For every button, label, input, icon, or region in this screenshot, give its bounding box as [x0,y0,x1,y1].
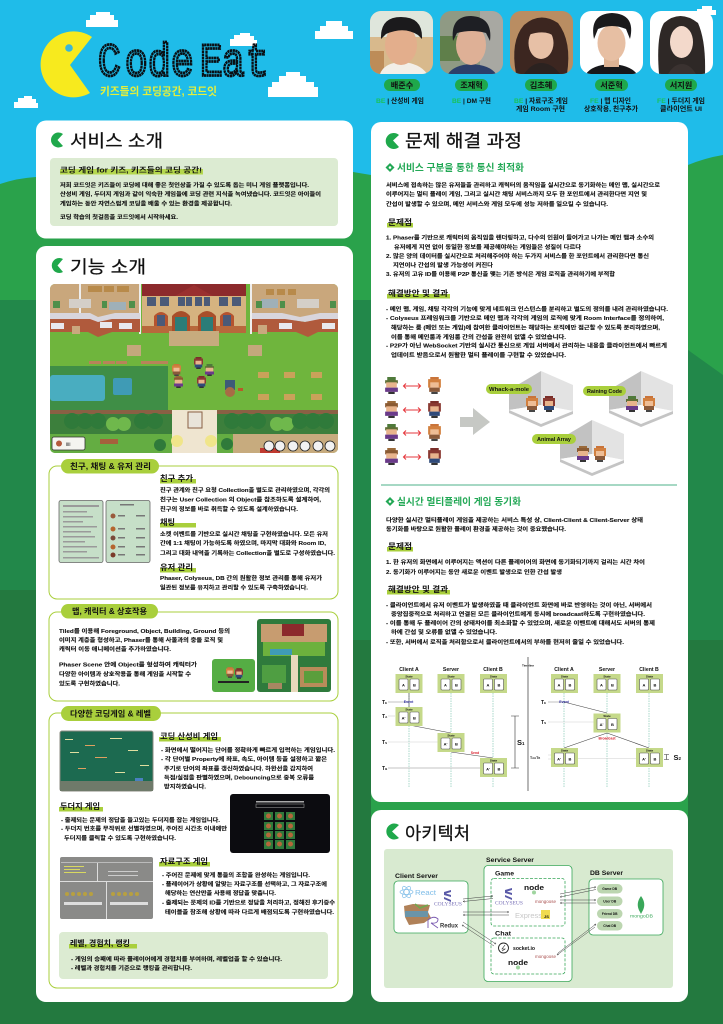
title: Code Eat [98,37,269,90]
member: 서지원: FE | 두더지 게임 [657,96,705,105]
text block: data structure game: - 출제되는 문제의 ID를 기반으로 정답을 처리하고, 정해진 후기증수 [162,898,336,906]
text block: acid rain game: 코딩 산성비 게임 [160,731,218,741]
db server: mongoDB [630,914,653,920]
text block: chat: 그리고 대화 내역을 기록하는 Collection을 별도로 구성하였습니다. [160,549,335,557]
labels: event, send, broadcast: Send [471,751,479,755]
figure: room raining code: Raining Code [587,389,622,395]
game server: node [524,883,544,892]
message lines [409,693,649,758]
column headers: Client A [399,667,419,673]
member: 배준수: 배준수 [391,80,414,90]
text block: map description [59,627,230,688]
time labels: TS [382,740,387,746]
time labels: TE [382,700,387,706]
state boxes: A' [444,742,447,746]
figure: room animal array: Animal Array [537,437,571,443]
text block: data structure game: 테이블을 참조해 상황에 따라 다르게 배점되도록 구현하였습니다. [165,908,334,916]
text box: service description: 코딩 학습의 첫걸음을 코드잇에서 시작하세요. [60,213,178,221]
member: 조재혁 [452,79,491,105]
column headers [399,667,659,673]
text block: data structure game: 해당하는 연산만을 사용해 정답을 맞춥니다. [165,889,276,897]
section 1 problems list: 1. Phaser를 기반으로 캐릭터의 움직임을 렌더링하고, 다수의 인원이 들어가고 나가는 메인 맵과 소수의 [386,234,654,242]
text box: service description: 저희 코드잇은 키즈들이 코딩에 대해 좋은 첫인상을 가질 수 있도록 돕는 미니 게임 플랫폼입니다. [60,181,309,189]
state boxes: State [490,758,497,762]
text block: map description: 이미지 계층을 형성하고, Phaser를 통해 사물과의 충돌 로직 및 [59,636,224,644]
section 2 solutions list: - 이를 통해 두 플레이어 간의 상태차이를 최소화할 수 있었으며, 새로운 이벤트에 대해서도 서버의 통제 [386,619,655,627]
client server: COLYSEUS [434,902,462,908]
text block: acid rain game: 득점/실점을 판별하였으며, Debouncing으로 중복 오류를 [164,774,315,782]
member: 서준혁 [584,79,639,113]
section 2 problems heading: 문제점 [388,541,412,551]
brackets S1 and S2 [511,716,682,768]
section 1 solutions list [386,305,668,359]
timeline [522,657,534,791]
state boxes: State [447,674,455,678]
text block: chat: 간에 1:1 채팅이 가능하도록 하였으며, 마지막 대화와 Room ID, [160,539,326,547]
sub panel: coding games and levels [49,706,338,988]
text block: user management: 유저 관리 [160,562,193,572]
state boxes: A' [486,766,490,772]
state boxes: State [603,714,611,718]
arrow: big gray [460,408,490,435]
figure: room animal array [532,420,624,476]
text block: add friends: 친구의 정보를 바로 취득할 수 있도록 설계하였습니다. [160,505,298,513]
section 1 solutions list: 해당하는 룸 (메인 또는 게임)에 참여한 클라이언트는 해당하는 로직에만 접근할 수 있도록 분리하였으며, [391,324,660,332]
sequence diagram [382,657,682,791]
member: 서준혁: FE | 맵 디자인 [590,96,631,105]
state boxes: B [455,742,458,746]
section 1 intro text [386,181,661,208]
state boxes: State [646,674,653,678]
section 1 solutions list: - Colyseus 프레임워크를 기반으로 메인 맵과 각각의 게임의 로직에 맞게 Room Interface를 정의하여, [386,314,664,322]
text block: acid rain game: 방지하였습니다. [164,782,206,790]
game map screenshot [50,284,338,453]
section 2 solutions list [386,601,655,646]
timing guide lines [388,702,636,768]
team members [370,11,713,74]
column headers: Server [599,667,615,673]
member: 배준수: BE | 산성비 게임 [376,96,424,105]
text block: whack a mole game: 두더지를 클릭할 수 있도록 구현하였습니다. [64,834,176,842]
game server: mongoose [535,899,557,904]
state boxes: B [569,682,572,688]
text block: acid rain game: 주기로 단어의 좌표를 갱신하였습니다. 하한선을 감지하여 [164,764,313,772]
text block: chat: 채팅 [160,517,175,527]
timeline: Timeline [522,664,534,668]
clouds [14,6,716,108]
member: 조재혁: BE | DM 구현 [452,96,491,105]
labels: event, send, broadcast: Broadcast [598,736,616,740]
state boxes: B [413,682,416,688]
chat server [491,930,565,974]
section 2 intro text: 다양한 실시간 멀티플레이 게임을 제공하는 서비스 특성 상, Client-Client & Client-Server 상태 [386,516,643,524]
pill heading [61,459,159,474]
state boxes: B [611,682,614,688]
time labels: TE [541,700,546,706]
text block: add friends: 친구 관계와 친구 요청 Collection을 별도로 관리하였으며, 각각의 [160,486,330,494]
section 1 problems list: 3. 유저의 고유 ID를 이용해 P2P 통신을 맺는 기존 방식은 게임 로직을 관리하기에 부적합 [386,270,616,278]
callout: level, experience, ranking: - 레벨과 경험치를 기준으로 랭킹을 관리합니다. [71,964,192,972]
text block: whack a mole game: 두더지 게임 [60,801,100,811]
section 1 solutions list: - 메인 맵, 게임, 채팅 각각의 기능에 맞게 네트워크 인스턴스를 분리하고 별도의 정의를 내려 관리하였습니다. [386,305,668,313]
chat server: mongoose [535,954,557,959]
db server: Chat DB [603,924,617,928]
labels: event, send, broadcast: Event [559,700,570,704]
pill heading: 친구, 채팅 & 유저 관리 [70,461,151,471]
time labels: TA [382,714,388,720]
column headers: Server [443,667,459,673]
logo: pac-man [41,31,92,97]
state boxes: State [490,674,497,678]
state boxes: A' [642,756,646,762]
section 1 intro text: 간섭이 발생할 수 있으며, 메인 서비스와 게임 모두에 성능 저하를 일으킬 수 있습니다. [386,200,608,208]
text block: map description: Phaser Scene 안에 Object를 형성하여 캐릭터가 [59,660,198,668]
callout: level, experience, ranking: - 게임의 승패에 따라 플레이어에게 경험치를 부여하며, 레벨업을 할 수 있습니다. [71,955,282,963]
text block: data structure game [159,856,336,916]
section 1 problems list: 유저에게 지연 없이 동일한 정보를 제공해야하는 게임들은 성질이 다르다 [394,243,582,251]
section 1 solutions list: 이를 통해 메인룸과 게임룸 간의 간섭을 완전히 없앨 수 있었습니다. [391,333,566,341]
panel: architecture [371,810,688,1002]
db server [589,870,663,935]
section 1 solutions list: - P2P가 아닌 WebSocket 기반의 실시간 통신으로 게임 서버에서 관리하는 내용을 클라이언트에서 빠르게 [386,342,667,350]
text block: map description: 캐릭터 이동 애니메이션을 추가하였습니다. [59,645,171,653]
text block: user management: Phaser, Colyseus, DB 간의 원활한 정보 관리를 통해 유저가 [160,574,323,582]
image: acid rain game [60,731,153,791]
section 2 solutions list: - 클라이언트에서 유저 이벤트가 발생하였을 때 클라이언트 화면에 바로 반영하는 것이 아닌, 서버에서 [386,601,652,609]
heading: features: 기능 소개 [70,257,146,277]
column headers: Client A [554,667,574,673]
photo: 배준수 [370,11,433,74]
state boxes: A' [402,716,405,720]
text block: whack a mole game: - 두더지 번호를 무작위로 선별하였으며, 주어진 시간초 이내에만 [61,824,228,832]
state boxes: A [643,682,646,688]
state boxes: State [405,674,413,678]
text block: acid rain game [159,731,335,790]
sub panel: map, character, interaction [49,604,338,701]
game server: Game [495,870,514,878]
subtitle: 키즈들의 코딩공간, 코드잇 [100,84,217,98]
column headers: Client B [483,667,503,673]
section 2 solutions list: 중앙집중적으로 처리하고 연결된 모든 클라이언트에게 동시에 broadcast하도록 구현하였습니다. [391,610,645,618]
time labels: TS [541,720,546,726]
image: character screenshot [212,659,255,692]
chat server: node [508,958,528,967]
panel: features [36,246,353,1002]
section 2 problems list [386,558,645,576]
service server: Service Server [486,857,534,864]
text block: data structure game: - 플레이어가 상황에 알맞는 자료구조를 선택하고, 그 자료구조에 [162,880,327,888]
text block: data structure game: - 주어진 문제에 맞게 통들의 조합을 완성하는 게임입니다. [162,871,310,879]
text block: acid rain game: - 화면에서 떨어지는 단어를 정확하게 빠르게 입력하는 게임입니다. [161,746,335,754]
text block: map description: Tiled를 이용해 Foreground, Object, Building, Ground 등의 [59,627,230,635]
section 2 intro text: 동기화를 바탕으로 원활한 플레이 환경을 제공하는 것이 중요했습니다. [386,525,566,533]
state boxes: A [558,682,561,688]
state boxes: State [447,734,455,738]
db server: DB Server [590,870,623,877]
game server: Express [515,911,542,920]
labels: event, send, broadcast [404,700,616,755]
state boxes [396,674,663,777]
section 1 solutions heading: 해결방안 및 결과 [388,288,449,298]
state boxes: A' [600,722,603,727]
time labels: TA=TB [530,756,540,760]
image: friend list [106,500,150,562]
sub panel: friends, chat, user management [49,459,338,599]
text block: user management [160,562,323,592]
section 2 heading: 실시간 멀티플레이 게임 동기화 [397,496,521,508]
game map screenshot: iiii [66,442,70,448]
client server: React [415,890,436,897]
state boxes: State [561,674,568,678]
team name pills and roles [376,79,705,113]
icon: section pac-man [51,133,63,148]
text block: add friends: 친구는 User Collection 의 Object를 참조하도록 설계하여, [160,496,321,504]
state boxes: A [444,682,447,688]
member: 서준혁: 서준혁 [600,80,623,90]
game server: COLYSEUS [495,900,523,906]
state boxes: B [455,682,458,688]
state boxes: A' [557,756,561,762]
pill heading: 맵, 캐릭터 & 상호작용 [72,606,148,616]
state boxes: State [405,708,413,712]
panel: problem solving [371,122,688,802]
text block: whack a mole game: - 출제되는 문제의 정답을 들고있는 두더지를 잡는 게임입니다. [61,816,220,824]
text box: service description: 산성비 게임, 두더지 게임과 같이 익숙한 게임들에 코딩 관련 지식을 녹여냈습니다. 코드잇은 아이들이 [60,190,321,198]
text block: user management: 일관된 정보를 유지하고 관리할 수 있도록 구축하였습니다. [160,584,308,592]
member: 김초혜 [514,79,568,113]
callout: level, experience, ranking [59,932,328,979]
db server: Friend DB [602,912,618,916]
text block: data structure game: 자료구조 게임 [160,856,208,866]
state boxes: A [487,682,490,688]
text box: service description [50,158,338,226]
photo: 조재혁 [440,11,503,74]
time labels [382,700,546,772]
architecture diagram background [384,849,673,988]
pill heading: 다양한 코딩게임 & 레벨 [70,708,151,718]
service server [484,857,572,982]
member: 배준수 [376,79,424,105]
section 1 problems list [386,234,654,278]
state boxes: B [569,756,572,762]
db server: User DB [603,900,617,904]
member: 서지원 [657,79,705,113]
state boxes: B [611,722,614,727]
chat server: Chat [495,930,512,938]
text block: whack a mole game [59,801,228,842]
figure: room whack-a-mole: Whack-a-mole [489,387,529,393]
section 1 heading: 서비스 구분을 통한 통신 최적화 [397,162,524,174]
state boxes: B [413,716,416,720]
section 1 problems heading: 문제점 [388,217,412,227]
client server: Redux [440,924,459,930]
panel: service intro [36,120,353,238]
pill heading [61,604,158,618]
member: 김초혜: 게임 Room 구현 [516,104,565,113]
figure: room whack-a-mole [486,371,573,427]
text block: acid rain game: - 각 단어별 Property에 좌표, 속도, 아이템 등을 설정하고 짧은 [161,755,328,763]
image: chat window [59,500,103,562]
member: 김초혜: BE | 자료구조 게임 [514,96,568,105]
member: 서지원: 클라이언트 UI [660,104,702,113]
photo: 서준혁 [580,11,643,74]
section 1 problems list: 2. 많은 양의 데이터를 실시간으로 처리해주어야 하는 두가지 서비스를 한 포인트에서 관리한다면 통신 [386,252,649,260]
member: 서준혁: 상호작용, 친구추가 [584,104,639,113]
icon: section pac-man [386,133,399,149]
state boxes: State [646,748,653,752]
arrows between servers [462,887,596,955]
client server: Client Server [395,873,438,880]
text block: map description: 있도록 구현하였습니다. [59,680,120,688]
member: 서지원: 서지원 [670,80,692,90]
brackets S1 and S2: S2 [674,753,682,762]
text box: service description: 게임하는 동안 자연스럽게 코딩을 배울 수 있는 환경을 제공합니다. [60,200,232,208]
game server: JS [544,914,549,919]
figure: peer to peer connections [385,377,441,465]
state boxes: B [654,682,657,688]
image: whack a mole game [230,794,330,853]
pill heading [61,706,161,721]
text block: add friends: 친구 추가 [160,473,194,483]
state boxes: A [600,682,603,688]
text block: chat [160,517,335,557]
section 2 solutions list: 하에 간섭 및 오류를 없앨 수 있었습니다. [391,628,497,636]
labels: event, send, broadcast: Event [404,700,414,704]
column lines [409,693,649,787]
client server [394,873,468,933]
member: 조재혁: 조재혁 [460,80,483,90]
state boxes: State [561,748,568,752]
image: tile map overview [257,619,331,692]
state boxes: B [498,682,501,688]
figure: room raining code [583,371,673,427]
text block: chat: 소켓 이벤트를 기반으로 실시간 채팅을 구현하였습니다. 모든 유저 [160,530,328,538]
column headers: Client B [639,667,659,673]
icon: section pac-man [386,824,399,840]
logo: pac-man eye [65,44,73,52]
chat server: socket.io [513,946,535,952]
db server: Game DB [602,887,618,891]
text block: map description: 다양한 아이템과 상호작용을 통해 게임을 시작할 수 [59,670,192,678]
section 1 intro text: 서비스에 접속하는 많은 유저들을 관리하고 캐릭터의 움직임을 실시간으로 동기화하는 메인 맵, 실시간으로 [386,181,661,189]
text box: service description: 코딩 게임 for 키즈, 키즈들의 코딩 공간! [60,164,202,174]
section 2 intro text [386,516,643,533]
section 1 solutions list: 업데이트 받음으로서 원활한 멀티 플레이를 구현할 수 있었습니다. [391,351,566,359]
section 2 solutions list: - 또한, 서버에서 로직을 처리함으로서 클라이언트에서의 부하를 현저히 줄일 수 있었습니다. [386,638,624,646]
section 1 problems list: 지연이나 간섭의 발생 가능성이 커진다 [393,261,494,269]
state boxes: State [603,674,611,678]
heading: problem solving: 문제 해결 과정 [405,131,522,151]
state boxes: A [402,682,405,688]
icon: section pac-man [52,258,63,273]
heading: service intro: 서비스 소개 [70,131,163,151]
section 1 intro text: 이루어지는 멀티 플레이 게임, 그리고 실시간 채팅 서비스까지 모두 한 포인트에서 관리한다면 지연 및 [386,190,648,198]
section 2 solutions heading: 해결방안 및 결과 [388,584,449,594]
section 2 problems list: 1. 한 유저의 화면에서 이루어지는 액션이 다른 플레이어의 화면에 동기화되기까지 걸리는 시간 차이 [386,558,645,566]
image: data structure game [60,857,153,919]
member: 김초혜: 김초혜 [530,80,552,90]
time labels: TB [382,766,388,772]
photo: 서지원 [650,11,713,74]
text block: add friends [160,473,330,513]
heading: architecture: 아키텍처 [405,824,470,844]
callout: level, experience, ranking: 레벨, 경험치, 랭킹 [70,938,130,948]
brackets S1 and S2: S1 [517,738,525,747]
state boxes: B [654,756,657,762]
photo: 김초혜 [510,11,573,74]
section 2 problems list: 2. 동기화가 이루어지는 동안 새로운 이벤트 발생으로 인한 간섭 발생 [386,568,562,576]
game server [491,870,565,926]
state boxes: B [498,766,501,772]
